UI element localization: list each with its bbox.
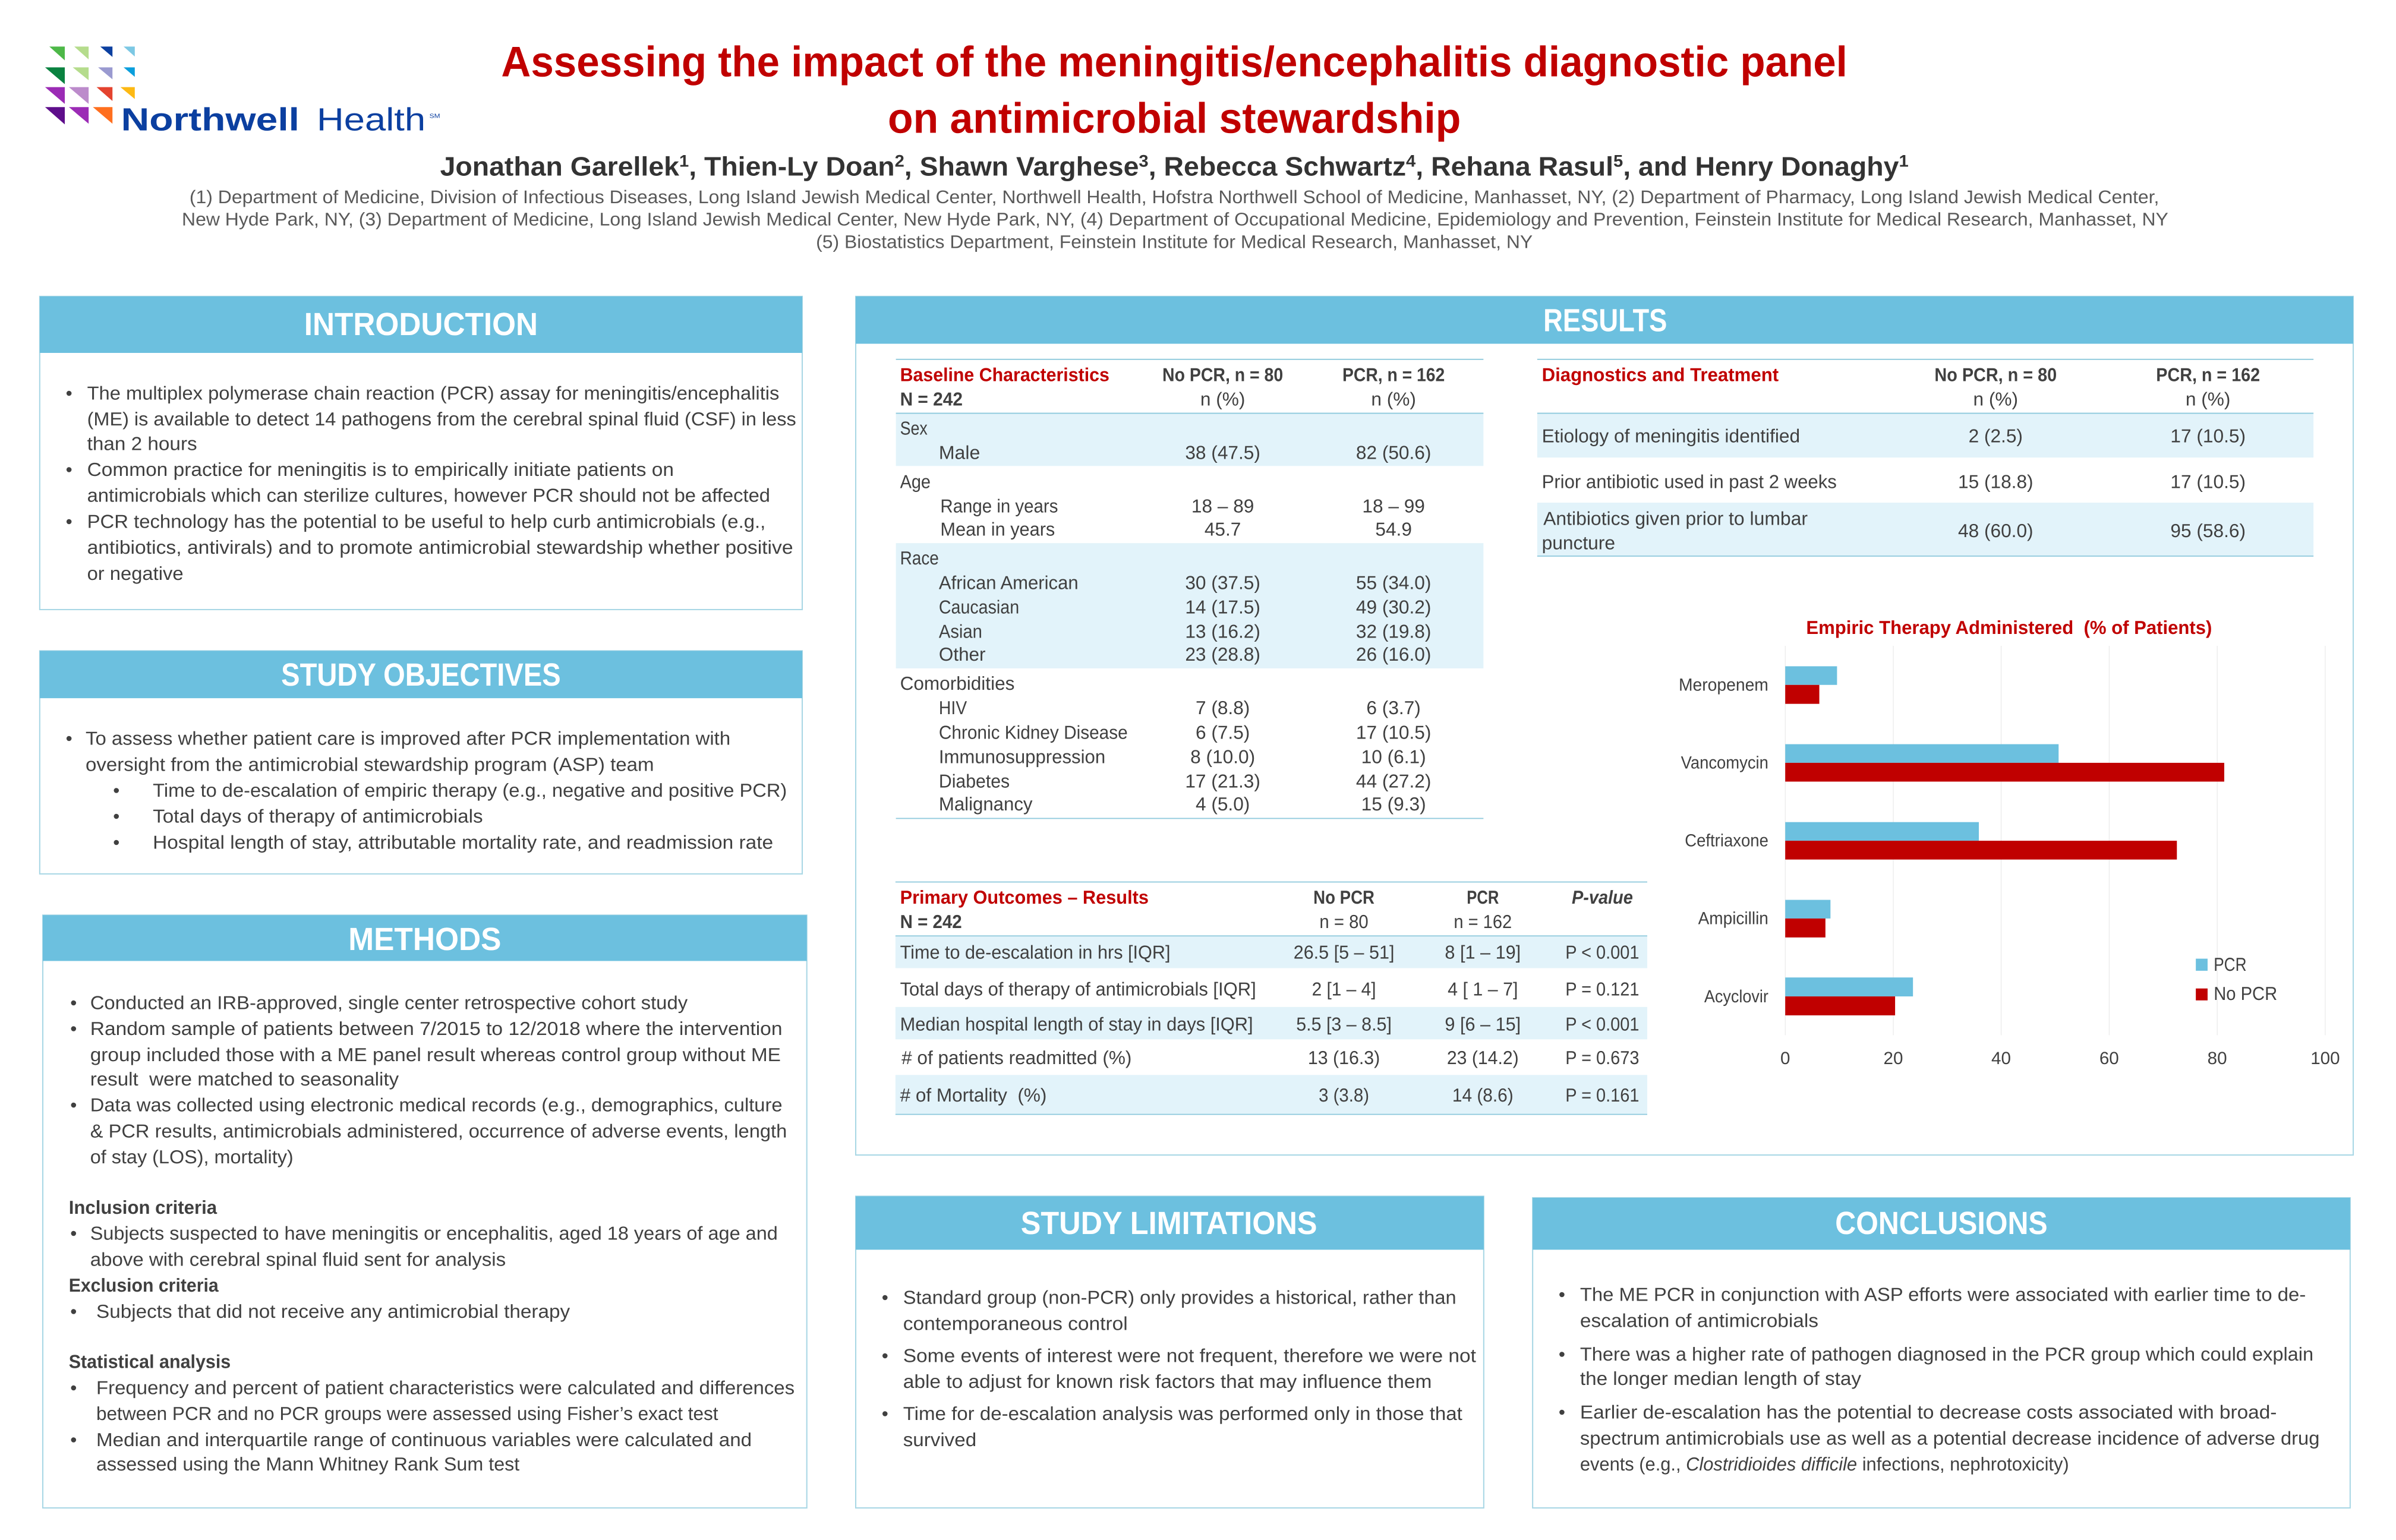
legend: No PCR	[2214, 983, 2277, 1005]
table: baseline characteristics: Sex	[900, 418, 929, 439]
table: primary outcomes: P = 0.673	[1565, 1047, 1640, 1069]
table: primary outcomes: 14 (8.6)	[1452, 1085, 1514, 1106]
bars: ceftriaxone	[1785, 822, 2177, 860]
table: baseline characteristics: 6 (7.5)	[1196, 722, 1250, 743]
bars: vancomycin	[1785, 744, 2224, 782]
authors: 4	[1406, 153, 1417, 171]
text block: conclusions bullets: events (e.g., Clostridioides difficile infections, nephrotoxicity)	[1580, 1454, 2069, 1475]
table: baseline characteristics: HIV	[939, 698, 968, 719]
table: primary outcomes: PCR	[1467, 887, 1499, 908]
text block: methods overview: of stay (LOS), mortality)	[90, 1147, 294, 1168]
table: baseline characteristics: 13 (16.2)	[1185, 621, 1260, 642]
table: baseline characteristics: Diabetes	[939, 771, 1010, 792]
legend: PCR	[2214, 954, 2247, 976]
table: diagnostics and treatment: Prior antibiotic used in past 2 weeks	[1542, 471, 1837, 493]
table: primary outcomes: n = 80	[1319, 911, 1369, 933]
text block: limitations bullets: •	[882, 1287, 888, 1308]
text block: objectives bullets: Total days of therapy of antimicrobials	[153, 806, 483, 827]
logo: Northwell Health: Northwell	[121, 103, 300, 138]
table: diagnostics and treatment: puncture	[1542, 532, 1615, 554]
text block: methods overview: •	[70, 1018, 77, 1040]
table: primary outcomes: Median hospital length of stay in days [IQR]	[900, 1014, 1253, 1035]
affiliations: New Hyde Park, NY, (3) Department of Medicine, Long Island Jewish Medical Center, New Hyde Park, NY, (4) Department of Occupational Medicine, Epidemiology and Prevention, Feinstein Institute for Medical Research, Manhasset, NY	[182, 209, 2168, 230]
table: diagnostics and treatment: PCR, n = 162	[2156, 364, 2261, 386]
table: baseline characteristics: 6 (3.7)	[1366, 698, 1421, 719]
text block: statistical analysis: Frequency and percent of patient characteristics were calculated and differences	[96, 1377, 795, 1399]
axis labels: 40	[1991, 1050, 2011, 1069]
text block: conclusions bullets: Earlier de-escalation has the potential to decrease costs associated with broad-	[1580, 1402, 2277, 1423]
text block: statistical analysis: assessed using the Mann Whitney Rank Sum test	[96, 1454, 521, 1475]
table: primary outcomes: # of patients readmitted (%)	[901, 1047, 1131, 1069]
text block: objectives bullets: Hospital length of stay, attributable mortality rate, and readmission rate	[153, 832, 774, 853]
table: baseline characteristics: 15 (9.3)	[1361, 794, 1426, 815]
logo: Northwell Health: SM	[430, 112, 440, 119]
table: baseline characteristics: Immunosuppression	[939, 746, 1106, 768]
text block: statistical analysis	[69, 1351, 795, 1475]
chart title: Empiric Therapy Administered (% of Patients)	[1806, 617, 2212, 639]
text block: limitations bullets: contemporaneous control	[903, 1313, 1128, 1334]
table: primary outcomes: 3 (3.8)	[1319, 1085, 1369, 1106]
table: primary outcomes: 4 [ 1 – 7]	[1448, 979, 1518, 1000]
category labels: Ampicillin	[1698, 911, 1768, 929]
table: primary outcomes: P < 0.001	[1565, 1014, 1640, 1035]
authors: , Rebecca Schwartz	[1149, 152, 1407, 182]
heading: introduction: INTRODUCTION	[304, 308, 538, 343]
logo: Northwell Health: Health	[317, 103, 425, 138]
table: baseline characteristics: Baseline Characteristics	[900, 364, 1109, 386]
table: primary outcomes: 26.5 [5 – 51]	[1294, 942, 1394, 963]
affiliations	[182, 187, 2168, 253]
title	[501, 38, 1848, 142]
table: baseline characteristics: 32 (19.8)	[1356, 621, 1431, 642]
table: diagnostics and treatment: 95 (58.6)	[2170, 520, 2246, 542]
text block: introduction bullets: or negative	[87, 563, 184, 585]
text block: introduction bullets: The multiplex polymerase chain reaction (PCR) assay for meningitis/encephalitis	[87, 383, 779, 404]
text block: limitations bullets: Time for de-escalation analysis was performed only in those that	[903, 1403, 1463, 1425]
table: baseline characteristics: 30 (37.5)	[1185, 572, 1260, 594]
table: diagnostics and treatment: 48 (60.0)	[1958, 520, 2034, 542]
table: primary outcomes: 2 [1 – 4]	[1312, 979, 1376, 1000]
text block: inclusion and exclusion criteria: Inclusion criteria	[69, 1197, 217, 1219]
text block: limitations bullets: able to adjust for known risk factors that may influence them	[903, 1371, 1432, 1393]
table: baseline characteristics: 82 (50.6)	[1356, 442, 1431, 463]
heading: results: RESULTS	[1543, 304, 1667, 339]
table: diagnostics and treatment	[1537, 359, 2313, 556]
authors: , Rehana Rasul	[1415, 152, 1613, 182]
text block: introduction bullets: (ME) is available to detect 14 pathogens from the cerebral spinal fluid (CSF) in less	[87, 409, 796, 430]
table: baseline characteristics: Age	[900, 471, 931, 493]
table: baseline characteristics: Male	[939, 442, 981, 463]
axis labels	[1780, 1050, 2340, 1069]
table: baseline characteristics: 44 (27.2)	[1356, 771, 1431, 792]
table: baseline characteristics: 14 (17.5)	[1185, 597, 1260, 618]
table: baseline characteristics: 54.9	[1375, 519, 1412, 540]
authors: , Thien-Ly Doan	[689, 152, 895, 182]
table: baseline characteristics	[896, 359, 1483, 819]
text block: objectives bullets: •	[113, 806, 119, 827]
bars: acyclovir	[1785, 977, 1913, 1015]
text block: inclusion and exclusion criteria	[69, 1197, 778, 1323]
authors: 3	[1139, 153, 1149, 171]
authors	[440, 152, 1909, 182]
text block: introduction bullets: antibiotics, antivirals) and to promote antimicrobial stewardship whether positive	[87, 537, 793, 558]
table: primary outcomes: 9 [6 – 15]	[1445, 1014, 1521, 1035]
authors: 2	[895, 153, 904, 171]
table: primary outcomes: P < 0.001	[1565, 942, 1640, 963]
authors: 5	[1613, 153, 1623, 171]
text block: limitations bullets: Standard group (non-PCR) only provides a historical, rather than	[903, 1287, 1456, 1308]
table: baseline characteristics: 38 (47.5)	[1185, 442, 1260, 463]
table: baseline characteristics: 26 (16.0)	[1356, 644, 1431, 665]
category labels: Vancomycin	[1681, 755, 1768, 773]
text block: conclusions bullets: •	[1559, 1344, 1565, 1365]
table: primary outcomes: 23 (14.2)	[1447, 1047, 1519, 1069]
heading: study objectives: STUDY OBJECTIVES	[281, 658, 561, 693]
table: primary outcomes: P-value	[1572, 887, 1633, 908]
table: primary outcomes: Total days of therapy of antimicrobials [IQR]	[900, 979, 1256, 1000]
text block: conclusions bullets: There was a higher rate of pathogen diagnosed in the PCR group which could explain	[1580, 1344, 2314, 1365]
table: baseline characteristics: N = 242	[900, 389, 963, 410]
category labels	[1679, 677, 1768, 1007]
text block: objectives bullets: Time to de-escalation of empiric therapy (e.g., negative and positive PCR)	[153, 780, 787, 801]
text block: objectives bullets: •	[113, 780, 119, 801]
text block: statistical analysis: Statistical analysis	[69, 1351, 231, 1372]
text block: statistical analysis: •	[70, 1377, 77, 1399]
text block: objectives bullets: To assess whether patient care is improved after PCR implementation with	[86, 728, 731, 749]
category labels: Acyclovir	[1704, 989, 1768, 1007]
axis labels: 0	[1780, 1050, 1790, 1069]
table: baseline characteristics: 8 (10.0)	[1190, 746, 1255, 768]
table: diagnostics and treatment: 17 (10.5)	[2170, 471, 2246, 493]
table: baseline characteristics: n (%)	[1200, 389, 1245, 410]
table: diagnostics and treatment: 2 (2.5)	[1969, 425, 2023, 447]
table: baseline characteristics: Chronic Kidney Disease	[939, 722, 1128, 743]
text block: objectives bullets: oversight from the antimicrobial stewardship program (ASP) team	[86, 754, 654, 775]
axis labels: 20	[1884, 1050, 1903, 1069]
text block: methods overview: Conducted an IRB-approved, single center retrospective cohort study	[90, 992, 689, 1014]
affiliations: (1) Department of Medicine, Division of Infectious Diseases, Long Island Jewish Medical Center, Northwell Health, Hofstra Northwell School of Medicine, Manhasset, NY, (2) Department of Pharmacy, Long Island Jewish Medical Center,	[190, 187, 2159, 208]
text block: inclusion and exclusion criteria: Subjects suspected to have meningitis or encephalitis, aged 18 years of age and	[90, 1223, 778, 1244]
text block: statistical analysis: between PCR and no PCR groups were assessed using Fisher’s exact test	[96, 1403, 719, 1425]
text block: limitations bullets: Some events of interest were not frequent, therefore we were not	[903, 1345, 1477, 1367]
text block: introduction bullets: Common practice for meningitis is to empirically initiate patients on	[87, 459, 674, 481]
text block: methods overview: Random sample of patients between 7/2015 to 12/2018 where the intervention	[90, 1018, 783, 1040]
table: baseline characteristics: 18 – 99	[1362, 496, 1425, 517]
table: primary outcomes	[896, 882, 1647, 1115]
chart: empiric therapy administered	[1679, 617, 2340, 1069]
text block: introduction bullets: •	[66, 459, 72, 481]
text block: inclusion and exclusion criteria: Subjects that did not receive any antimicrobial therapy	[96, 1301, 571, 1323]
text block: methods overview: & PCR results, antimicrobials administered, occurrence of adverse events, length	[90, 1121, 787, 1142]
text block: introduction bullets: antimicrobials which can sterilize cultures, however PCR should not be affected	[87, 485, 770, 506]
text block: limitations bullets: •	[882, 1403, 888, 1425]
bars: meropenem	[1785, 666, 1837, 704]
text block: methods overview	[70, 992, 787, 1168]
axis labels: 80	[2208, 1050, 2227, 1069]
panel: conclusions	[1533, 1198, 2350, 1508]
table: diagnostics and treatment: n (%)	[1973, 389, 2018, 410]
table: baseline characteristics: Comorbidities	[900, 673, 1014, 695]
bars: ampicillin	[1785, 900, 1830, 938]
heading: conclusions: CONCLUSIONS	[1835, 1207, 2048, 1242]
table: baseline characteristics: African American	[939, 572, 1079, 594]
table: primary outcomes: n = 162	[1454, 911, 1512, 933]
heading: study limitations: STUDY LIMITATIONS	[1021, 1207, 1317, 1242]
text block: conclusions bullets	[1559, 1284, 2320, 1475]
text block: introduction bullets: •	[66, 511, 72, 532]
table: baseline characteristics: Mean in years	[940, 519, 1055, 540]
text block: conclusions bullets: •	[1559, 1284, 1565, 1305]
category labels: Meropenem	[1679, 677, 1768, 695]
text block: limitations bullets: •	[882, 1345, 888, 1367]
text block: statistical analysis: •	[70, 1429, 77, 1451]
text block: limitations bullets	[882, 1287, 1477, 1451]
text block: conclusions bullets: the longer median length of stay	[1580, 1368, 1862, 1390]
text block: introduction bullets: PCR technology has the potential to be useful to help curb antimicrobials (e.g.,	[87, 511, 765, 532]
table: primary outcomes: No PCR	[1313, 887, 1374, 908]
table: baseline characteristics: Other	[939, 644, 986, 665]
text block: introduction bullets: than 2 hours	[87, 433, 197, 455]
text block: inclusion and exclusion criteria: above with cerebral spinal fluid sent for analysis	[90, 1249, 506, 1270]
table: diagnostics and treatment: Etiology of meningitis identified	[1542, 425, 1801, 447]
table: baseline characteristics: Malignancy	[939, 794, 1034, 815]
text block: objectives bullets: •	[66, 728, 72, 749]
table: baseline characteristics: 18 – 89	[1191, 496, 1254, 517]
panel: study limitations	[856, 1196, 1484, 1508]
logo: Northwell Health	[45, 46, 440, 138]
table: baseline characteristics: Range in years	[940, 496, 1058, 517]
axis labels: 60	[2099, 1050, 2119, 1069]
table: diagnostics and treatment: No PCR, n = 80	[1934, 364, 2057, 386]
text block: introduction bullets	[66, 383, 796, 585]
table: diagnostics and treatment: Diagnostics and Treatment	[1542, 364, 1779, 386]
title: Assessing the impact of the meningitis/encephalitis diagnostic panel	[501, 38, 1848, 86]
text block: methods overview: result were matched to seasonality	[90, 1069, 400, 1090]
text block: limitations bullets: survived	[903, 1429, 977, 1451]
table: baseline characteristics: 10 (6.1)	[1361, 746, 1426, 768]
table: baseline characteristics: PCR, n = 162	[1342, 364, 1445, 386]
text block: conclusions bullets: escalation of antimicrobials	[1580, 1310, 1818, 1331]
table: diagnostics and treatment: 15 (18.8)	[1958, 471, 2034, 493]
table: baseline characteristics: 45.7	[1205, 519, 1241, 540]
table: primary outcomes: Time to de-escalation in hrs [IQR]	[900, 942, 1170, 963]
text block: methods overview: group included those with a ME panel result whereas control group without ME	[90, 1044, 781, 1066]
text block: inclusion and exclusion criteria: •	[70, 1223, 77, 1244]
text block: conclusions bullets: •	[1559, 1402, 1565, 1423]
table: baseline characteristics: 49 (30.2)	[1356, 597, 1431, 618]
table: primary outcomes: 13 (16.3)	[1308, 1047, 1380, 1069]
authors: , and Henry Donaghy	[1623, 152, 1899, 182]
text block: methods overview: Data was collected using electronic medical records (e.g., demographics, culture	[90, 1094, 783, 1116]
table: baseline characteristics: n (%)	[1371, 389, 1416, 410]
axis labels: 100	[2310, 1050, 2340, 1069]
panel: results	[856, 296, 2353, 1155]
table: primary outcomes: P = 0.161	[1565, 1085, 1640, 1106]
text block: inclusion and exclusion criteria: Exclusion criteria	[69, 1275, 219, 1296]
text block: objectives bullets	[66, 728, 787, 853]
panel: introduction	[40, 296, 802, 610]
table: diagnostics and treatment: Antibiotics given prior to lumbar	[1543, 508, 1808, 529]
table: primary outcomes: 5.5 [3 – 8.5]	[1296, 1014, 1392, 1035]
table: primary outcomes: P = 0.121	[1565, 979, 1640, 1000]
text block: introduction bullets: •	[66, 383, 72, 404]
table: primary outcomes: Primary Outcomes – Results	[900, 887, 1149, 908]
table: diagnostics and treatment: n (%)	[2186, 389, 2231, 410]
category labels: Ceftriaxone	[1685, 832, 1768, 851]
authors: Jonathan Garellek	[440, 152, 672, 182]
affiliations: (5) Biostatistics Department, Feinstein Institute for Medical Research, Manhasset, NY	[816, 231, 1533, 253]
table: baseline characteristics: No PCR, n = 80	[1162, 364, 1284, 386]
table: baseline characteristics: 7 (8.8)	[1196, 698, 1250, 719]
authors: 1	[1899, 153, 1909, 171]
table: primary outcomes: N = 242	[900, 911, 962, 933]
table: baseline characteristics: 4 (5.0)	[1196, 794, 1250, 815]
text block: inclusion and exclusion criteria: •	[70, 1301, 77, 1323]
table: primary outcomes: 8 [1 – 19]	[1445, 942, 1521, 963]
table: baseline characteristics: 55 (34.0)	[1356, 572, 1431, 594]
table: primary outcomes: # of Mortality (%)	[900, 1085, 1046, 1106]
table: baseline characteristics: Asian	[939, 621, 982, 642]
text block: conclusions bullets: spectrum antimicrobials use as well as a potential decrease incidence of adverse drug	[1580, 1428, 2320, 1449]
text block: objectives bullets: •	[113, 832, 119, 853]
table: diagnostics and treatment: 17 (10.5)	[2170, 425, 2246, 447]
table: baseline characteristics: 17 (21.3)	[1185, 771, 1260, 792]
heading: methods: METHODS	[348, 923, 501, 958]
text block: statistical analysis: Median and interquartile range of continuous variables were calculated and	[96, 1429, 752, 1451]
panel: methods	[43, 915, 807, 1508]
legend	[2196, 954, 2277, 1005]
text block: methods overview: •	[70, 992, 77, 1014]
panel: study objectives	[40, 651, 802, 874]
authors: , Shawn Varghese	[904, 152, 1139, 182]
title: on antimicrobial stewardship	[888, 94, 1461, 142]
table: baseline characteristics: 17 (10.5)	[1356, 722, 1431, 743]
table: baseline characteristics: Race	[900, 548, 939, 569]
table: baseline characteristics: Caucasian	[939, 597, 1020, 618]
authors: 1	[679, 153, 689, 171]
text block: conclusions bullets: The ME PCR in conjunction with ASP efforts were associated with earlier time to de-	[1580, 1284, 2306, 1305]
text block: methods overview: •	[70, 1094, 77, 1116]
table: baseline characteristics: 23 (28.8)	[1185, 644, 1260, 665]
